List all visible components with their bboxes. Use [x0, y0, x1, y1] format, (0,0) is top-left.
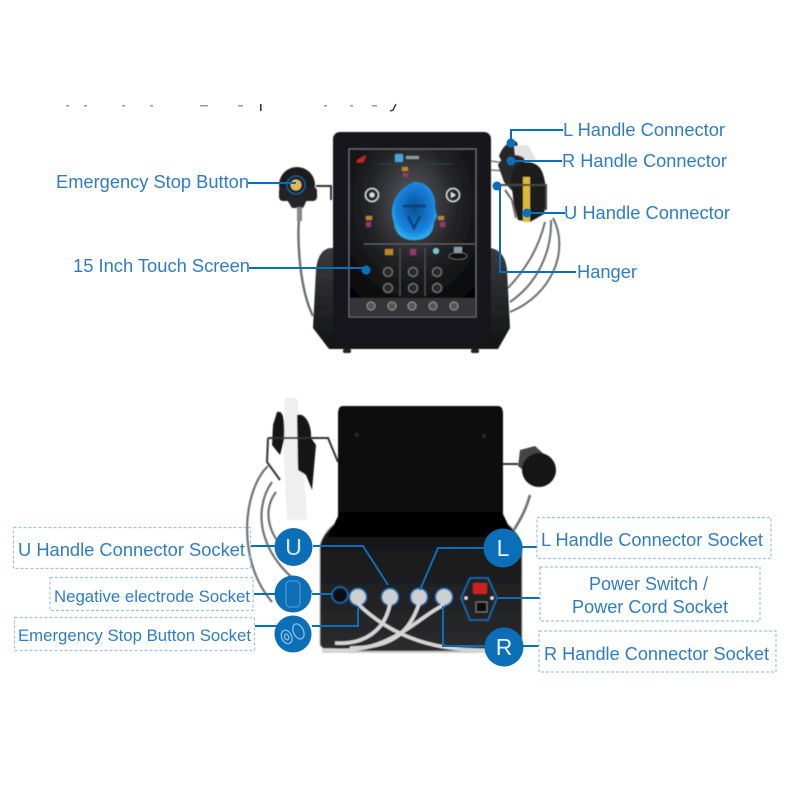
- back panel: [338, 406, 503, 520]
- label: L Handle Connector: L Handle Connector: [563, 120, 725, 140]
- cables: [299, 208, 559, 316]
- base: [313, 248, 510, 349]
- face detail: [403, 206, 426, 228]
- label: R Handle Connector: R Handle Connector: [562, 151, 727, 171]
- rear stop button: [503, 463, 518, 465]
- callout leader lines: [248, 130, 576, 646]
- callout box: R Handle Connector Socket: R Handle Connector Socket: [544, 644, 769, 664]
- callout box: Power Switch / Power Cord Socket: [540, 567, 760, 621]
- label: Hanger: Hanger: [577, 262, 637, 282]
- label: Emergency Stop Button: Emergency Stop Button: [56, 172, 249, 192]
- box: [320, 518, 522, 652]
- connected cables rear: [322, 604, 505, 652]
- handle pair: [272, 412, 284, 455]
- screen: [349, 149, 476, 317]
- label: U Handle Connector: U Handle Connector: [564, 203, 730, 223]
- emergency stop button: [316, 186, 331, 200]
- callout box: U Handle Connector Socket: U Handle Connector Socket: [18, 540, 245, 560]
- callout box: Negative electrode Socket: [50, 578, 253, 610]
- cables rear: [247, 466, 530, 602]
- white handle: [283, 398, 307, 520]
- badge: U: U: [285, 534, 302, 560]
- badge: emergency stop: [274, 616, 312, 652]
- callout box: Negative electrode Socket: Negative electrode Socket: [54, 587, 250, 606]
- face graphic: [392, 182, 437, 240]
- front view machine: [279, 132, 559, 353]
- badge: U: [274, 528, 312, 566]
- callout box: Power Switch / Power Cord Socket: Power Switch /: [589, 574, 708, 594]
- body: [333, 132, 491, 344]
- badge: L: [484, 528, 522, 568]
- top bar icons: [357, 155, 366, 163]
- callout box: R Handle Connector Socket: [539, 631, 776, 672]
- callout box: Emergency Stop Button Socket: Emergency Stop Button Socket: [18, 626, 251, 645]
- label: 15 Inch Touch Screen: 15 Inch Touch Screen: [73, 256, 250, 276]
- power socket: [461, 578, 497, 620]
- rear view machine: [247, 398, 556, 652]
- badge: negative electrode: [274, 576, 312, 612]
- callout box: Emergency Stop Button Socket: [14, 618, 254, 650]
- badge: L: L: [497, 535, 510, 561]
- callout box: U Handle Connector Socket: [14, 528, 250, 568]
- callout box: Power Switch / Power Cord Socket: Power Cord Socket: [572, 597, 728, 617]
- badge: R: R: [496, 634, 512, 660]
- ports: [332, 587, 348, 603]
- clipped caption remnants: [66, 104, 396, 111]
- callout box: L Handle Connector Socket: L Handle Connector Socket: [541, 530, 763, 550]
- badge: R: [484, 628, 524, 666]
- callout box: L Handle Connector Socket: [537, 518, 771, 558]
- handles on hanger: [491, 161, 505, 171]
